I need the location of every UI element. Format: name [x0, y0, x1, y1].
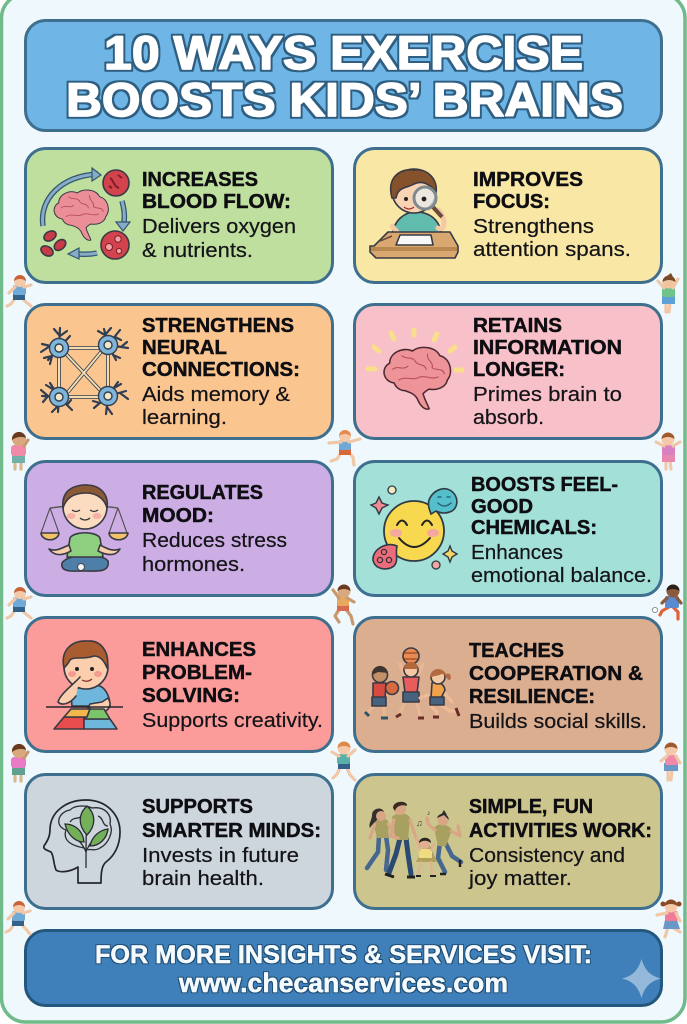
heading: regulates mood: [142, 482, 263, 527]
heading: increases blood flow: INCREASES: [142, 169, 258, 191]
heading: retains information longer: RETAINS: [473, 315, 562, 337]
kid: girl green right 1: [658, 273, 678, 312]
title text: [66, 26, 623, 126]
kid: running boy left 5: [6, 901, 30, 934]
kid: center kid 2: [333, 584, 354, 624]
heading: simple fun activities work: [469, 796, 652, 842]
text: strengthens attention spans: Strengthens: [473, 215, 594, 238]
text: delivers oxygen: [142, 215, 296, 262]
text: reduces stress hormones: Reduces stress: [142, 529, 287, 552]
kid: soccer boy right 3: [652, 584, 681, 619]
title banner: [26, 20, 662, 130]
footer text: FOR MORE INSIGHTS & SERVICES VISIT:: [95, 941, 592, 969]
kid: girl pink right 2: [656, 432, 680, 469]
text: invests in future brain health: Invests in future: [142, 844, 299, 867]
icon: smiley with bubbles and sparkles: [371, 486, 457, 569]
footer text: [95, 941, 592, 998]
heading: simple fun activities work: ACTIVITIES WORK:: [469, 820, 652, 842]
kid: center kid 1: [329, 430, 360, 465]
title text: BOOSTS KIDS’ BRAINS: [66, 73, 623, 126]
panel: strengthens neural connections: [26, 304, 332, 438]
text: enhances emotional balance: emotional balance.: [471, 564, 652, 587]
heading: enhances problem-solving: SOLVING:: [142, 685, 240, 707]
text: strengthens attention spans: [473, 215, 631, 261]
heading: teaches cooperation and resilience: [469, 640, 643, 708]
heading: increases blood flow: [142, 169, 291, 213]
heading: enhances problem-solving: PROBLEM-: [142, 662, 252, 684]
heading: simple fun activities work: SIMPLE, FUN: [469, 796, 593, 818]
heading: retains information longer: [473, 315, 622, 381]
icon: neuron network: [41, 328, 128, 414]
kid: running boy left 3: [7, 587, 31, 618]
text: supports creativity: Supports creativity.: [142, 709, 323, 732]
kid: girl pink left 2: [11, 432, 28, 469]
heading: supports smarter minds: SUPPORTS: [142, 796, 253, 818]
panel: supports smarter minds: [26, 774, 332, 908]
kid: running boy left 1: [7, 275, 31, 306]
heading: strengthens neural connections: [142, 315, 300, 381]
text: enhances emotional balance: Enhances: [471, 541, 563, 564]
text: reduces stress hormones: hormones.: [142, 553, 245, 576]
text: delivers oxygen: & nutrients.: [142, 239, 253, 262]
panel: regulates mood: [26, 462, 332, 596]
text: consistency and joy matter: Consistency and: [469, 844, 625, 867]
heading: improves focus: IMPROVES: [473, 169, 583, 191]
panel: simple fun activities work: [354, 774, 662, 908]
heading: improves focus: FOCUS:: [473, 191, 550, 213]
text: aids memory and learning: Aids memory &: [142, 383, 290, 406]
panel: retains information longer: [354, 304, 662, 438]
text: aids memory and learning: [142, 383, 290, 429]
panel: improves focus: [354, 148, 662, 282]
icon: family dancing with music notes: ♪: [427, 810, 430, 817]
heading: teaches cooperation and resilience: TEACHES: [469, 640, 564, 662]
text: invests in future brain health: [142, 844, 299, 890]
heading: strengthens neural connections: NEURAL: [142, 337, 227, 359]
text: enhances emotional balance: [471, 541, 652, 587]
heading: boosts feel-good chemicals: [471, 474, 618, 539]
text: consistency and joy matter: [468, 844, 625, 890]
text: reduces stress hormones: [142, 529, 287, 576]
heading: increases blood flow: BLOOD FLOW:: [142, 191, 291, 213]
heading: retains information longer: INFORMATION: [473, 337, 622, 359]
icon: sparkle: [622, 959, 661, 998]
heading: supports smarter minds: SMARTER MINDS:: [142, 820, 321, 842]
kid: girl pink right 5: [657, 900, 682, 937]
heading: regulates mood: REGULATES: [142, 482, 263, 504]
heading: strengthens neural connections: CONNECTIONS:: [142, 359, 300, 381]
heading: boosts feel-good chemicals: BOOSTS FEEL-: [471, 474, 618, 496]
icon: meditating child with scales: [41, 485, 128, 571]
icon: family dancing with music notes: [367, 802, 461, 877]
heading: regulates mood: MOOD:: [142, 505, 214, 527]
heading: retains information longer: LONGER:: [473, 359, 565, 381]
text: primes brain to absorb: absorb.: [473, 406, 544, 429]
icon: brain with blood cells: [39, 168, 130, 259]
panel: boosts feel-good chemicals: [354, 462, 662, 596]
icon: three kids playing ball: [365, 648, 459, 718]
icon: child solving a puzzle: [46, 641, 123, 729]
icon: glowing brain: [368, 330, 462, 409]
kid: center kid 3: [332, 742, 355, 780]
kid: girl pink left 4: [11, 744, 28, 781]
text: delivers oxygen: Delivers oxygen: [142, 215, 296, 238]
panel: increases blood flow: [26, 148, 332, 282]
text: primes brain to absorb: [473, 383, 622, 429]
icon: boy with magnifying glass at desk: [370, 169, 458, 258]
text: consistency and joy matter: joy matter.: [468, 867, 572, 890]
text: invests in future brain health: brain health.: [142, 867, 264, 890]
heading: teaches cooperation and resilience: RESILIENCE:: [469, 686, 595, 708]
panel: teaches cooperation and resilience: [354, 618, 662, 752]
text: builds social skills: Builds social skills.: [469, 710, 647, 733]
footer text: www.checanservices.com: [178, 968, 508, 998]
footer banner: [26, 930, 662, 1006]
heading: improves focus: [473, 169, 583, 213]
kid: girl pink right 4: [661, 742, 680, 780]
text: strengthens attention spans: attention spans.: [473, 238, 631, 261]
heading: enhances problem-solving: [142, 639, 256, 707]
text: aids memory and learning: learning.: [142, 406, 227, 429]
icon: head with growing plant: [44, 800, 120, 883]
heading: strengthens neural connections: STRENGTHENS: [142, 315, 294, 337]
icon: family dancing with music notes: ♫: [416, 818, 423, 828]
text: primes brain to absorb: Primes brain to: [473, 383, 622, 406]
heading: supports smarter minds: [142, 796, 321, 842]
heading: boosts feel-good chemicals: GOOD: [471, 496, 533, 518]
title text: 10 WAYS EXERCISE: [104, 26, 583, 79]
heading: enhances problem-solving: ENHANCES: [142, 639, 256, 661]
heading: teaches cooperation and resilience: COOPERATION &: [469, 663, 643, 685]
panel: enhances problem-solving: [26, 618, 332, 752]
heading: boosts feel-good chemicals: CHEMICALS:: [471, 517, 597, 539]
